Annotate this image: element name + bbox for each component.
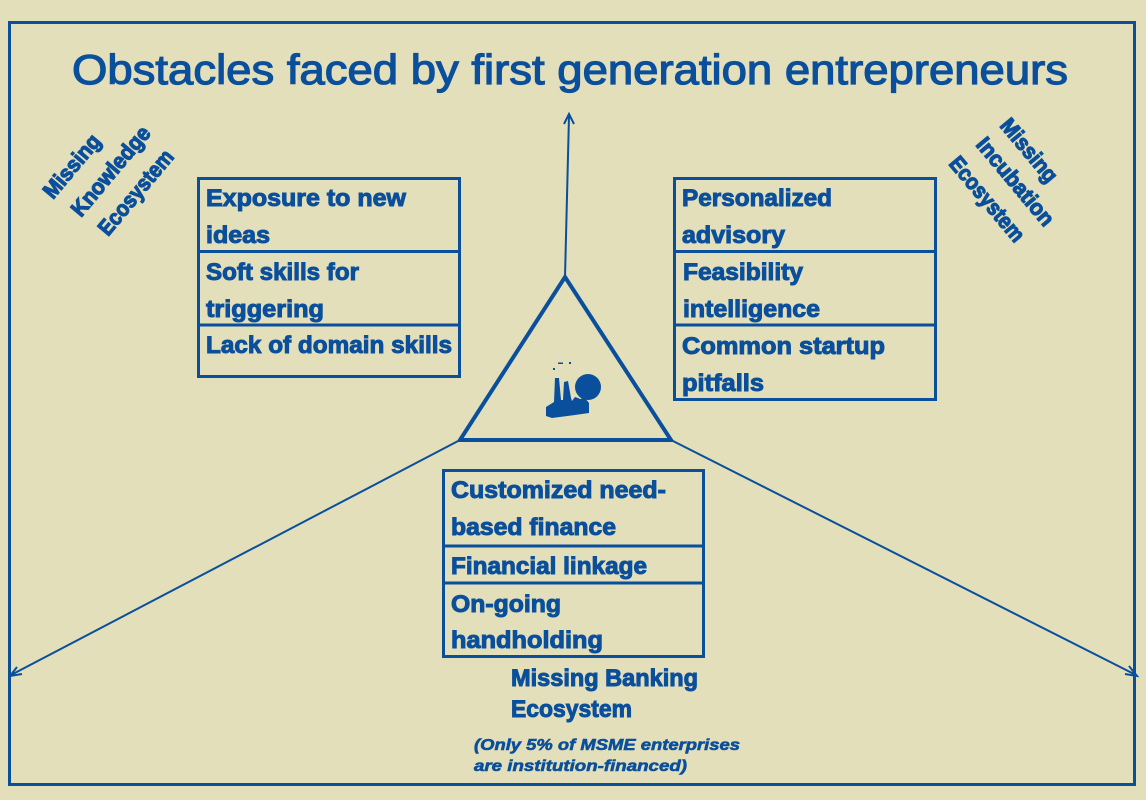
note: MSME financing: are institution-financed) [474,758,687,775]
central triangle [460,277,671,440]
text: soft skills: Soft skills for [206,259,359,286]
text: exposure to new ideas [206,185,406,249]
text: lack of domain skills: Lack of domain skills [206,332,452,359]
text: feasibility intelligence: intelligence [683,296,820,323]
text: soft skills: triggering [206,296,324,323]
rotated label: Missing Incubation Ecosystem: Missing [995,113,1063,187]
text: personalized advisory: Personalized [682,185,832,212]
text: personalized advisory [682,185,832,249]
note: MSME financing: (Only 5% of MSME enterprises [474,737,740,754]
text: feasibility intelligence [683,259,820,323]
text: exposure to new ideas: ideas [206,222,270,249]
panel: knowledge obstacles [198,178,460,376]
icon: factory with smoke [546,362,601,418]
text: customized need-based finance: based finance [451,514,616,541]
rotated label: Missing Knowledge Ecosystem: Ecosystem [93,144,179,240]
rotated label: Missing Incubation Ecosystem: Incubation [971,132,1060,231]
text: on-going handholding: handholding [451,627,603,654]
rotated label: Missing Incubation Ecosystem: Ecosystem [944,151,1030,247]
text: common startup pitfalls: Common startup [682,333,885,360]
arrow: lower left [10,440,460,676]
text: feasibility intelligence: Feasibility [683,259,804,286]
panel: incubation obstacles [674,178,936,400]
label: Missing Banking Ecosystem: Ecosystem [511,696,632,723]
text: common startup pitfalls [682,333,885,397]
text: customized need-based finance [451,477,666,541]
arrow: up to title [564,114,574,277]
title: Obstacles faced by first generation entrepreneurs [72,46,1068,93]
text: on-going handholding: On-going [451,591,561,618]
arrow: lower right [671,440,1137,676]
label: Missing Banking Ecosystem: Missing Banking [511,665,698,692]
text: common startup pitfalls: pitfalls [682,370,764,397]
panel: banking obstacles [443,470,704,656]
rotated label: Missing Knowledge Ecosystem: Knowledge [66,121,156,221]
label: Missing Banking Ecosystem [511,665,698,723]
rotated label: Missing Incubation Ecosystem [944,113,1063,247]
rotated label: Missing Knowledge Ecosystem: Missing [38,129,106,203]
text: personalized advisory: advisory [682,222,786,249]
text: soft skills [206,259,359,323]
text: on-going handholding [451,591,603,654]
text: customized need-based finance: Customized need- [451,477,666,504]
text: financial linkage: Financial linkage [451,553,647,580]
note: MSME financing [474,737,740,775]
text: exposure to new ideas: Exposure to new [206,185,406,212]
rotated label: Missing Knowledge Ecosystem [38,121,179,240]
